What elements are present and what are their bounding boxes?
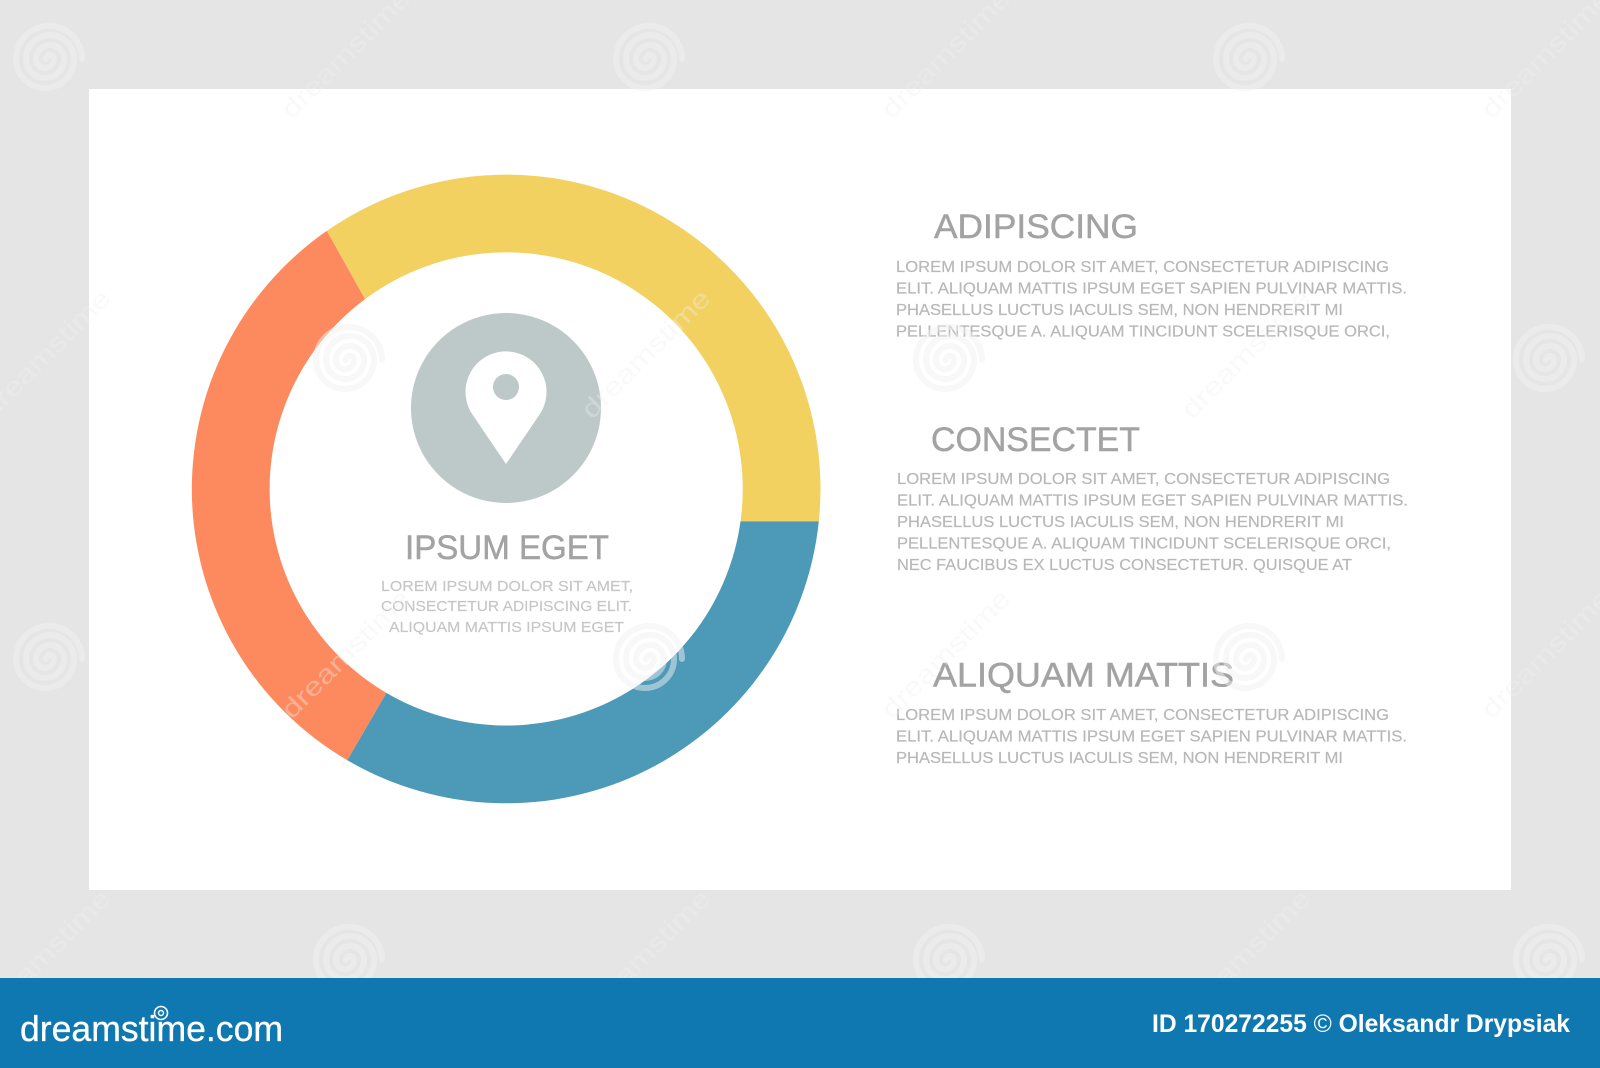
watermark overlay: dreamstime (1175, 883, 1316, 1024)
watermark overlay: dreamstime (1475, 583, 1600, 724)
text block: aliquam mattis: PHASELLUS LUCTUS IACULIS SEM, NON HENDRERIT MI (896, 750, 1343, 767)
watermark overlay: dreamstime (1175, 283, 1316, 424)
text block: consectet: LOREM IPSUM DOLOR SIT AMET, CONSECTETUR ADIPISCING (897, 471, 1390, 488)
center text block: ALIQUAM MATTIS IPSUM EGET (389, 620, 624, 636)
segment: yellow (327, 175, 820, 521)
heading: aliquam mattis: ALIQUAM MATTIS (933, 656, 1234, 694)
footer bar (0, 978, 1600, 1068)
footer logo: dreamstime.com (20, 1008, 283, 1049)
center heading: IPSUM EGET (405, 529, 609, 567)
footer credit: ID 170272255 © Oleksandr Drypsiak (1152, 1010, 1570, 1038)
watermark overlay: dreamstime (275, 583, 416, 724)
text block: adipiscing: LOREM IPSUM DOLOR SIT AMET, CONSECTETUR ADIPISCING (896, 259, 1389, 276)
text block: aliquam mattis: LOREM IPSUM DOLOR SIT AMET, CONSECTETUR ADIPISCING (896, 707, 1389, 724)
text block: consectet: PHASELLUS LUCTUS IACULIS SEM, NON HENDRERIT MI (897, 514, 1344, 531)
segment: blue (347, 521, 819, 803)
text block: aliquam mattis (896, 707, 1407, 767)
center text block: CONSECTETUR ADIPISCING ELIT. (381, 599, 632, 615)
heading: consectet: CONSECTET (931, 421, 1140, 459)
text block: consectet: NEC FAUCIBUS EX LUCTUS CONSECTETUR. QUISQUE AT (897, 557, 1353, 574)
donut chart (192, 175, 820, 803)
watermark overlay: dreamstime (275, 0, 416, 124)
text block: adipiscing: ELIT. ALIQUAM MATTIS IPSUM EGET SAPIEN PULVINAR MATTIS. (896, 280, 1407, 298)
center text block: LOREM IPSUM DOLOR SIT AMET, (381, 579, 633, 595)
text block: adipiscing: PELLENTESQUE A. ALIQUAM TINCIDUNT SCELERISQUE ORCI, (896, 324, 1390, 340)
watermark overlay: dreamstime (875, 0, 1016, 124)
watermark overlay: dreamstime (575, 283, 716, 424)
watermark overlay: dreamstime (575, 883, 716, 1024)
watermark overlay: dreamstime (875, 583, 1016, 724)
text block: aliquam mattis: ELIT. ALIQUAM MATTIS IPSUM EGET SAPIEN PULVINAR MATTIS. (896, 728, 1407, 746)
watermark overlay: dreamstime (1475, 0, 1600, 124)
text block: adipiscing: PHASELLUS LUCTUS IACULIS SEM, NON HENDRERIT MI (896, 302, 1343, 319)
heading: adipiscing: ADIPISCING (934, 208, 1138, 246)
center text block (381, 579, 633, 636)
text block: consectet: PELLENTESQUE A. ALIQUAM TINCIDUNT SCELERISQUE ORCI, (897, 536, 1391, 552)
icon: location pin in circle (411, 313, 601, 503)
text block: consectet (897, 471, 1408, 574)
text block: adipiscing (896, 259, 1407, 340)
text block: consectet: ELIT. ALIQUAM MATTIS IPSUM EGET SAPIEN PULVINAR MATTIS. (897, 492, 1408, 510)
white slide panel (89, 89, 1511, 890)
segment: orange (192, 231, 386, 760)
